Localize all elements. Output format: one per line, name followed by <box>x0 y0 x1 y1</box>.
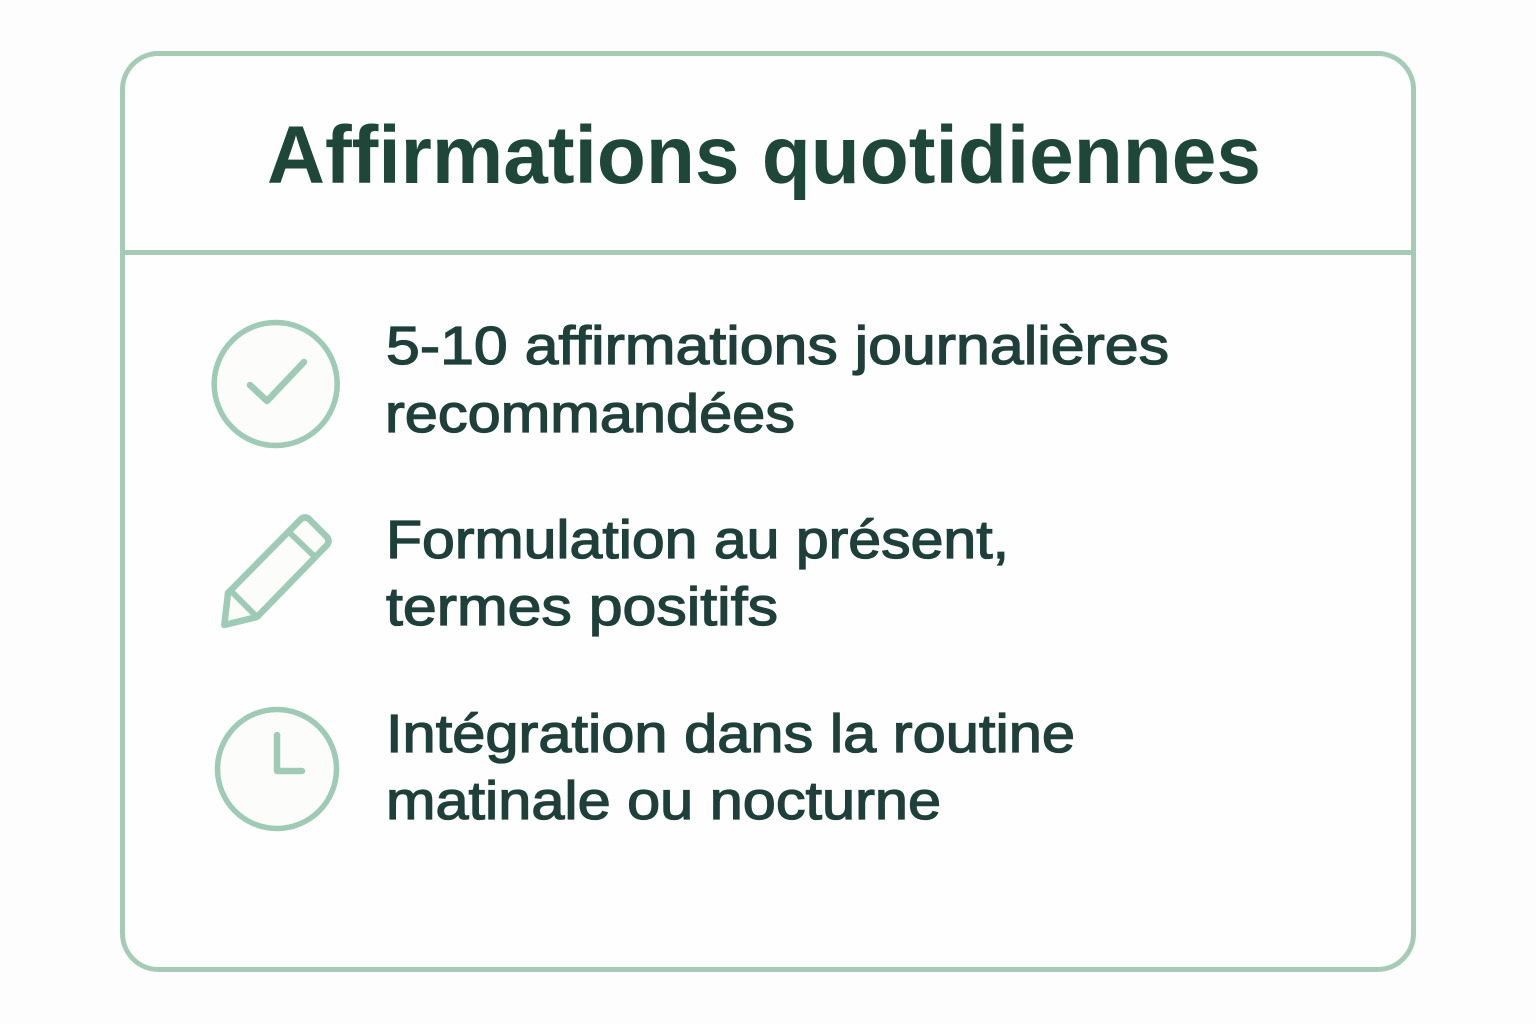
panel: card <box>122 54 1414 970</box>
text: routine: matinale ou nocturne <box>386 771 941 831</box>
item: wording <box>224 510 1009 637</box>
icon: check mark in circle <box>214 322 337 446</box>
text: daily affirmations: recommandées <box>385 384 795 444</box>
icon: pencil <box>224 518 328 625</box>
text: routine <box>386 704 1075 831</box>
item: daily affirmations <box>214 316 1169 446</box>
icon: clock <box>218 710 336 828</box>
item: routine <box>218 704 1075 831</box>
text: daily affirmations <box>385 316 1169 444</box>
text: wording: termes positifs <box>386 577 778 637</box>
text: wording: Formulation au présent, <box>386 510 1009 570</box>
text: wording <box>386 510 1009 637</box>
text: daily affirmations: 5-10 affirmations journalières <box>386 316 1169 376</box>
text: routine: Intégration dans la routine <box>386 704 1075 764</box>
title: Affirmations quotidiennes <box>267 110 1261 201</box>
